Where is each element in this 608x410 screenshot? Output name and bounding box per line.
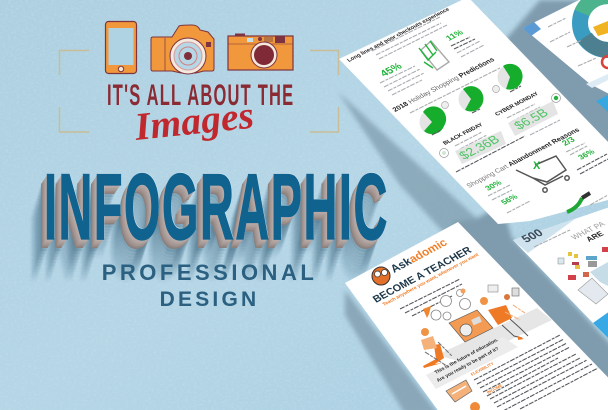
subtitle: Teach anywhere you want, whenever you want — [382, 252, 480, 308]
tagline: images script: Images — [133, 94, 256, 149]
stat 30: 30% — [483, 179, 504, 192]
heading: BECOME A TEACHER — [371, 245, 474, 305]
gray floor band — [437, 308, 552, 362]
brand name: Askadomic — [389, 237, 450, 275]
title: Long lines and poor checkouts experience — [346, 7, 451, 63]
tagline: it's all about the: IT'S ALL ABOUT THE — [107, 79, 294, 112]
subheading: professional: PROFESSIONAL — [102, 260, 317, 285]
black friday: BLACK FRIDAY — [442, 122, 485, 146]
illustration — [558, 247, 608, 304]
heading: WHAT PA — [569, 220, 608, 241]
icon cluster — [425, 285, 525, 368]
trophy — [423, 306, 431, 318]
truck icon — [593, 21, 608, 36]
gray question band — [426, 337, 518, 389]
income: INCOME — [486, 383, 504, 395]
stat 2/3: 2/3 — [559, 135, 577, 147]
bottom blue band — [593, 311, 608, 340]
owl logo — [372, 267, 390, 285]
stat 56: 56% — [499, 193, 520, 206]
number 500: 500 — [518, 226, 546, 245]
colour wheel — [580, 0, 608, 50]
heading: infographic: INFOGRAPHIC — [44, 154, 389, 259]
person — [480, 297, 528, 340]
pie charts — [420, 64, 523, 135]
icon: shopping cart — [516, 156, 569, 192]
stat 11: 11% — [443, 27, 465, 42]
blue tab — [523, 22, 541, 36]
orange screen — [449, 310, 493, 342]
stat 45: 45% — [378, 61, 405, 79]
heading: predictions: 2018 Holiday Shopping Predictions — [392, 57, 496, 113]
icon: orange figure — [470, 402, 480, 410]
cart cross: X — [533, 160, 541, 172]
heading: abandonment: Shopping Cart Abandonment Reasons — [466, 127, 581, 189]
subheading: design: DESIGN — [160, 288, 259, 311]
value: black friday — [455, 131, 506, 164]
gauges — [431, 290, 470, 320]
icon: phone payment — [419, 41, 449, 70]
chair — [423, 344, 444, 368]
small circle icons — [552, 94, 560, 102]
panel: become a teacher sheet: Are you ready to be part of it? — [436, 346, 500, 384]
panel: checkout sheet: $2.36B — [456, 132, 503, 162]
red ring — [602, 56, 608, 68]
panel: checkout sheet: $6.5B — [511, 106, 551, 132]
question text: This is the future of education. — [434, 337, 500, 376]
top band — [513, 219, 575, 253]
icon: monitor — [446, 380, 472, 402]
flexibility: FLEXIBILITY — [470, 361, 495, 377]
cyber monday: CYBER MONDAY — [494, 91, 540, 117]
stat 36: 36% — [576, 148, 597, 161]
value: cyber monday — [508, 101, 558, 136]
panel: what parents sheet: ARE — [584, 230, 606, 243]
green arc — [567, 198, 582, 212]
